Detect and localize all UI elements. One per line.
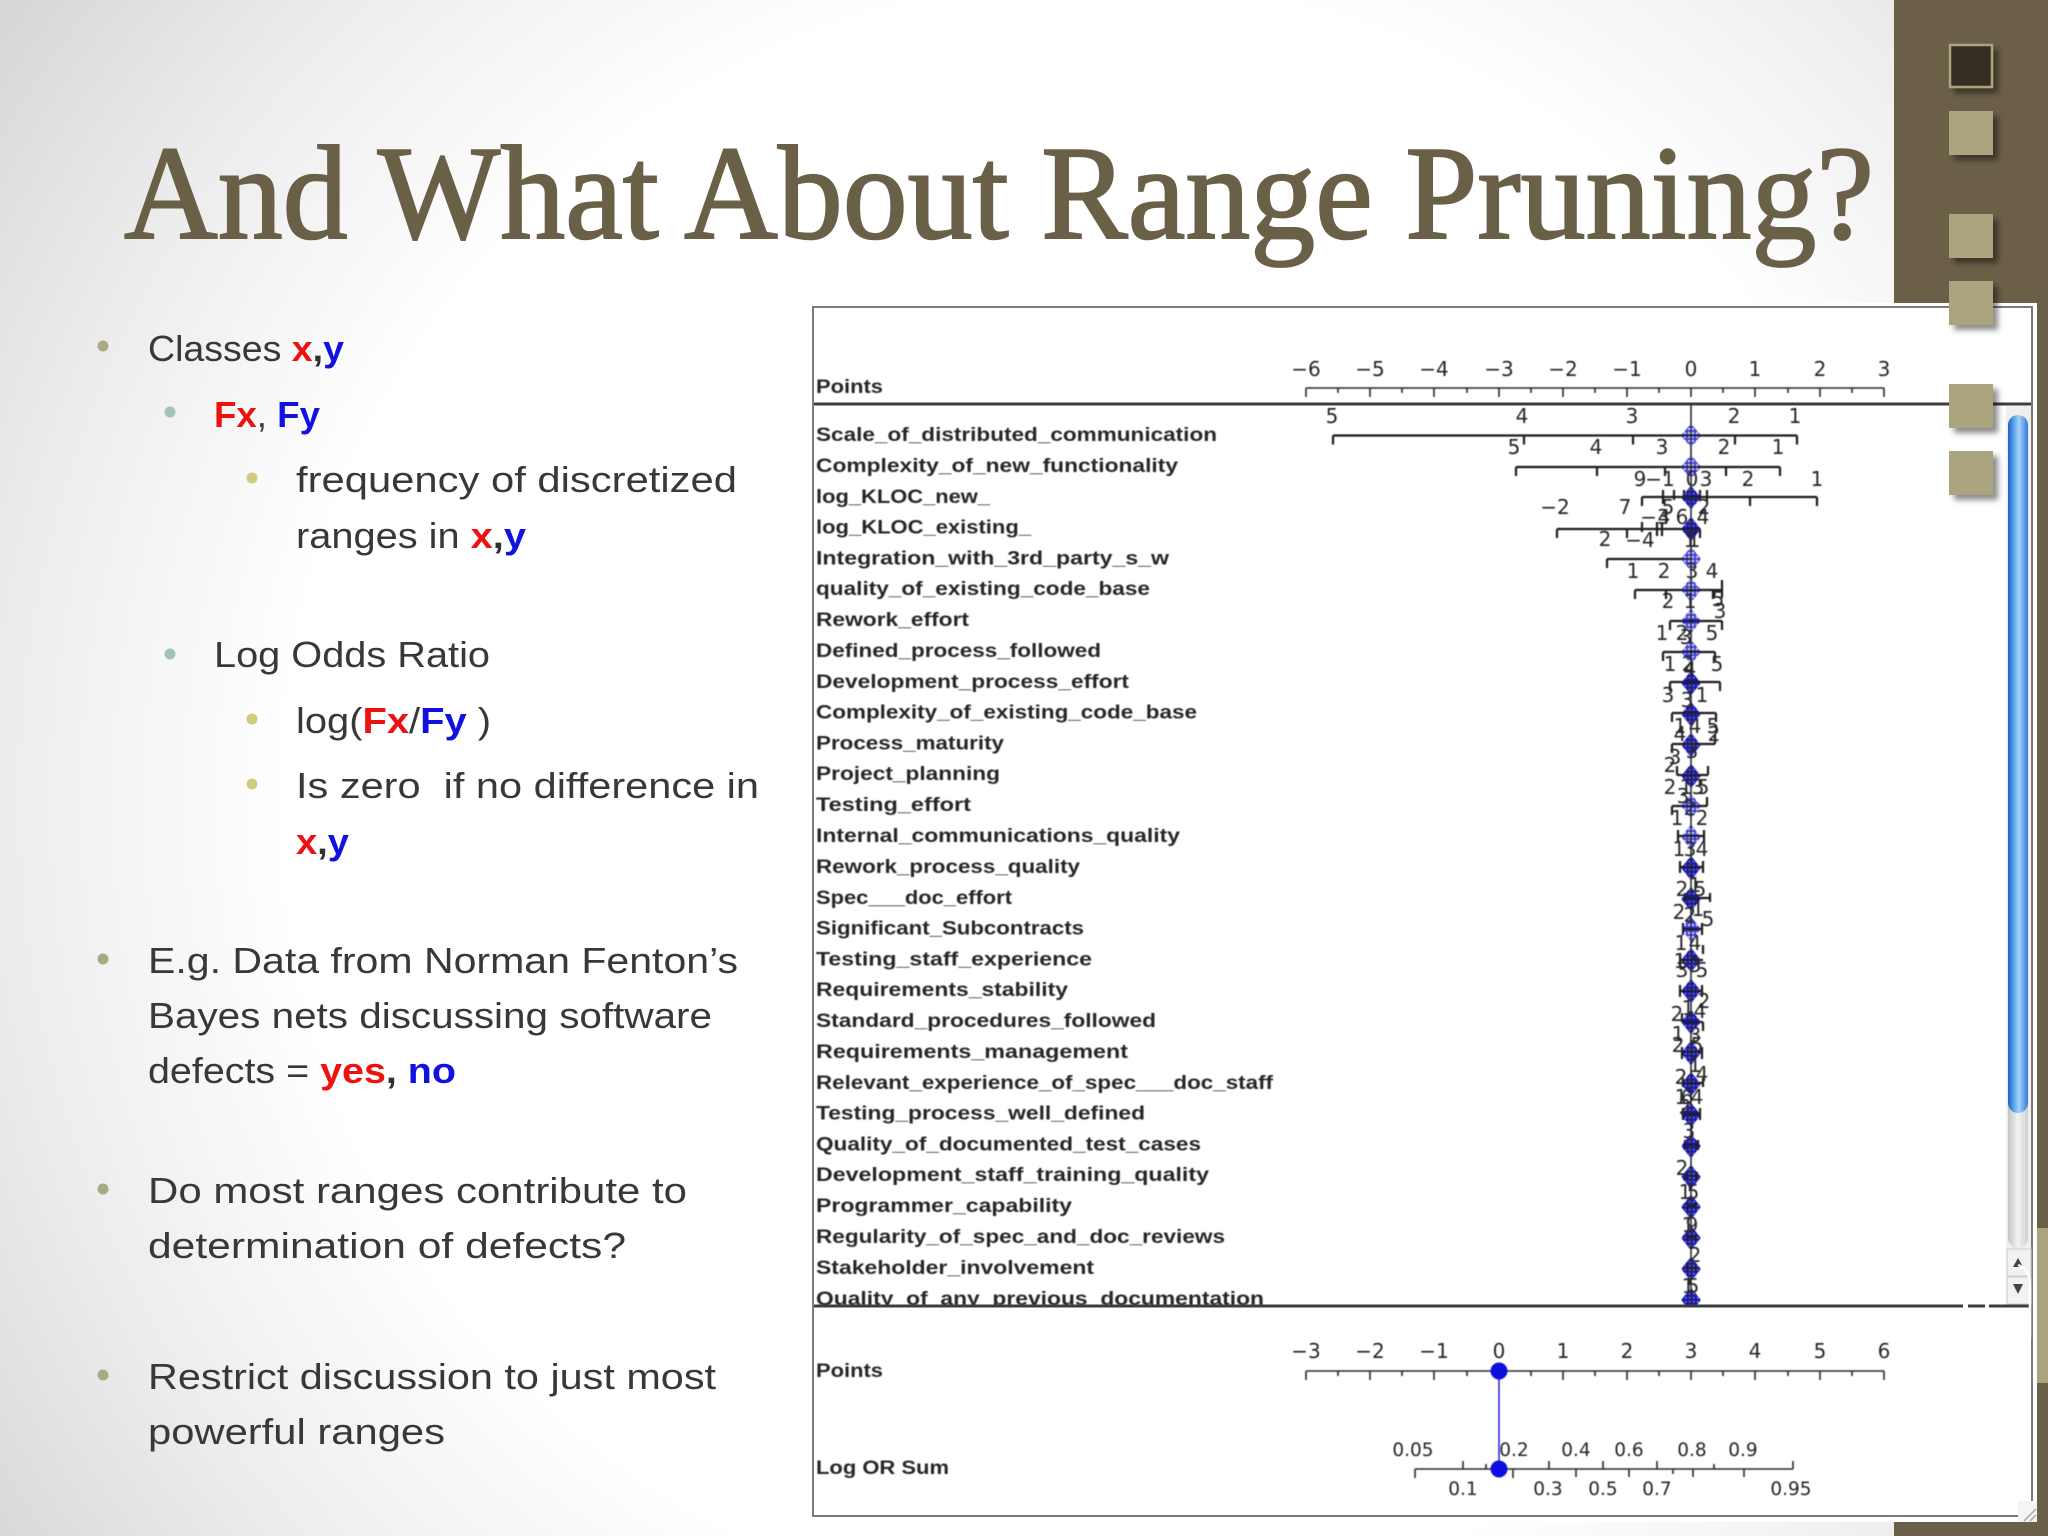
row point labels: 4 (1674, 722, 1686, 746)
square: 6 (1949, 451, 1993, 495)
text: frequency: frequency of discretized (296, 459, 737, 500)
row labels: Programmer_capability (816, 1196, 1073, 1217)
row point labels: 1 (1656, 621, 1668, 645)
row point labels: 3 (1692, 775, 1704, 799)
white mask under chart body (814, 1307, 2031, 1515)
row labels: Defined_process_followed (816, 641, 1101, 662)
bottom points axis: 4 (1749, 1339, 1761, 1363)
row point labels: 3 (1677, 784, 1689, 808)
row labels: Testing_staff_experience (816, 950, 1092, 970)
row point labels: 3 (1686, 559, 1698, 583)
row labels: Quality_of_any_previous_documentation (816, 1289, 1264, 1310)
row labels: Rework_effort (816, 610, 970, 631)
row point labels: 5 (1508, 435, 1520, 459)
row point labels: 5 (1696, 958, 1708, 982)
row point labels: 5 (1702, 907, 1714, 931)
row point labels: 1 (1672, 1022, 1684, 1046)
row labels: Development_process_effort (816, 672, 1130, 693)
row labels: Requirements_management (816, 1042, 1129, 1063)
title: And What About Range Pruning? (124, 119, 1874, 267)
window resize grip (2018, 1501, 2037, 1522)
bottom points axis: 3 (1685, 1339, 1697, 1363)
text: restrict line 2: powerful ranges (148, 1411, 445, 1452)
row point labels: 1 (1696, 683, 1708, 707)
row point labels: 1 (1664, 652, 1676, 676)
row point labels: 4 (1697, 505, 1709, 529)
text: ranges: ranges in x,y (296, 515, 526, 556)
row point labels: 4 (1516, 404, 1528, 428)
row labels: Stakeholder_involvement (816, 1258, 1095, 1279)
row labels: Testing_process_well_defined (816, 1104, 1145, 1124)
row point labels: 3 (1683, 1119, 1695, 1143)
scrollbar (2006, 406, 2031, 1304)
log OR sum axis: 0.4 (1561, 1440, 1591, 1461)
row point labels: 1 (1688, 528, 1700, 552)
row point labels: 9 (1634, 467, 1646, 491)
row point labels: 3 (1686, 739, 1698, 763)
row point labels: 4 (1706, 559, 1718, 583)
sidebar navigation squares (1949, 45, 1993, 495)
top axis (816, 357, 1890, 398)
row labels: log_KLOC_new_ (816, 487, 990, 508)
row labels (816, 425, 1274, 1310)
row point labels: 2 (1689, 1243, 1701, 1267)
log OR sum axis: 0.9 (1728, 1440, 1758, 1461)
row point labels: 4 (1691, 1085, 1703, 1109)
text: is zero: Is zero if no difference in (296, 765, 759, 806)
row point labels: 5 (1326, 404, 1338, 428)
row point labels: 2 (1673, 900, 1685, 924)
row point labels: 2 (1675, 1065, 1687, 1089)
row point labels: 3 (1689, 953, 1701, 977)
header divider (814, 402, 2031, 406)
row point labels: 4 (1684, 657, 1696, 681)
row point labels: 2 (1728, 404, 1740, 428)
row point labels: 5 (1711, 652, 1723, 676)
row point labels: 3 (1669, 745, 1681, 769)
row point labels: 4 (1696, 1062, 1708, 1086)
row point labels: 5 (1687, 1180, 1699, 1204)
text: do most line 1: Do most ranges contribute to (148, 1170, 687, 1211)
row point labels: 7 (1619, 495, 1631, 519)
row labels: Rework_process_quality (816, 857, 1081, 878)
row point labels: 1 (1684, 589, 1696, 613)
top axis: 0 (1685, 357, 1697, 381)
row point labels: 4 (1658, 505, 1670, 529)
row point labels: 2 (1698, 989, 1710, 1013)
row point labels: 1 (1675, 931, 1687, 955)
row point labels: 2 (1658, 559, 1670, 583)
text: do most line 2: determination of defects? (148, 1225, 626, 1266)
top axis: 3 (1878, 357, 1890, 381)
row labels: Spec___doc_effort (816, 888, 1013, 909)
bottom points axis: 5 (1814, 1339, 1826, 1363)
row point labels: 3 (1656, 435, 1668, 459)
row point labels: 1 (1680, 775, 1692, 799)
row point labels: 4 (1590, 435, 1602, 459)
row point labels: −2 (1540, 495, 1570, 519)
bottom points axis: −2 (1355, 1339, 1385, 1363)
top axis: Points (816, 377, 883, 398)
row point labels: 1 (1679, 1180, 1691, 1204)
row labels: log_KLOC_existing_ (816, 518, 1031, 538)
row labels: Regularity_of_spec_and_doc_reviews (816, 1227, 1225, 1248)
row labels: quality_of_existing_code_base (816, 579, 1150, 600)
row point labels: 1 (1682, 996, 1694, 1020)
row point labels: 5 (1691, 1033, 1703, 1057)
row point labels: 4 (1696, 837, 1708, 861)
square: 4 (1949, 281, 1993, 325)
row point labels: 2 (1599, 527, 1611, 551)
row point labels: 1 (1789, 404, 1801, 428)
row point labels: 2 (1676, 1156, 1688, 1180)
row labels: Testing_effort (816, 795, 972, 816)
row scales (1333, 436, 1817, 1272)
row point labels (1326, 404, 1823, 1298)
row labels: Quality_of_documented_test_cases (816, 1134, 1201, 1156)
row point labels: 2 (1742, 467, 1754, 491)
row point labels: 9 (1686, 1213, 1698, 1237)
row point labels: 5 (1707, 714, 1719, 738)
text: Fx, Fy: Fx, Fy (214, 394, 320, 435)
text: log odds ratio: Log Odds Ratio (214, 634, 490, 675)
bullet dots (98, 340, 258, 1380)
top axis: −3 (1484, 357, 1514, 381)
row point labels: 5 (1694, 877, 1706, 901)
row point labels: 1 (1811, 467, 1823, 491)
row point labels: 6 (1681, 1085, 1693, 1109)
square: 3 (1949, 214, 1993, 258)
row labels: Process_maturity (816, 734, 1005, 754)
square: 5 (1949, 384, 1993, 428)
row point labels: −1 (1645, 467, 1675, 491)
text: log formula: log(Fx/Fy ) (296, 700, 491, 741)
row point labels: 5 (1706, 621, 1718, 645)
row labels: Standard_procedures_followed (816, 1011, 1156, 1032)
row point labels: 3 (1680, 625, 1692, 649)
row point labels: 2 (1672, 1033, 1684, 1057)
top axis: −2 (1548, 357, 1578, 381)
log OR sum axis: 0.8 (1677, 1440, 1707, 1461)
row point labels: 1 (1684, 528, 1696, 552)
row point labels: 2 (1671, 1002, 1683, 1026)
row point labels: 5 (1687, 1274, 1699, 1298)
row point labels: 2 (1676, 621, 1688, 645)
row point labels: −4 (1625, 528, 1655, 552)
row labels: Project_planning (816, 764, 1000, 785)
log OR sum axis (816, 1440, 1812, 1500)
top axis: −6 (1291, 357, 1321, 381)
row point labels: 1 (1627, 559, 1639, 583)
bottom points axis: 0 (1493, 1339, 1505, 1363)
row point labels: −3 (1640, 505, 1670, 529)
row point labels: 2 (1684, 903, 1696, 927)
row point labels: 3 (1689, 1023, 1701, 1047)
row point labels: 1 (1674, 714, 1686, 738)
text: classes: Classes x,y (148, 328, 344, 369)
text: restrict line 1: Restrict discussion to just most (148, 1356, 716, 1397)
log OR sum axis: Log OR Sum (816, 1458, 949, 1479)
log OR sum axis: 0.6 (1614, 1440, 1644, 1461)
log OR sum axis: 0.1 (1448, 1479, 1478, 1500)
row point labels: 3 (1681, 688, 1693, 712)
row point labels: 3 (1662, 683, 1674, 707)
top axis: 2 (1814, 357, 1826, 381)
row labels: Relevant_experience_of_spec___doc_staff (816, 1073, 1274, 1094)
log OR sum axis: 0.3 (1533, 1479, 1563, 1500)
top axis: 1 (1749, 357, 1761, 381)
row point labels: 4 (1689, 714, 1701, 738)
panel: nomogram chart (810, 303, 2037, 1522)
row point labels: 0 (1686, 467, 1698, 491)
log OR sum axis: 0.7 (1642, 1479, 1672, 1500)
row point labels: 1 (1682, 1213, 1694, 1237)
row point labels: 1 (1689, 873, 1701, 897)
row point labels: 2 (1718, 435, 1730, 459)
row labels: Scale_of_distributed_communication (816, 425, 1217, 446)
row point labels: 1 (1674, 949, 1686, 973)
row point labels: 2 (1664, 775, 1676, 799)
top axis: −1 (1612, 357, 1642, 381)
row point labels: 1 (1673, 837, 1685, 861)
row point labels: 3 (1700, 467, 1712, 491)
row point labels: 2 (1696, 806, 1708, 830)
row point labels: 5 (1662, 495, 1674, 519)
white arc artefact (2018, 1265, 2030, 1351)
row labels: Requirements_stability (816, 980, 1069, 1001)
row point labels: 1 (1682, 1274, 1694, 1298)
text: e.g. line 3: defects = yes, no (148, 1050, 456, 1091)
row point labels: 2 (1662, 589, 1674, 613)
row point labels: 2 (1676, 877, 1688, 901)
row labels: Development_staff_training_quality (816, 1165, 1210, 1186)
bottom points axis: 2 (1621, 1339, 1633, 1363)
top axis: −5 (1355, 357, 1385, 381)
row point labels: 3 (1684, 837, 1696, 861)
row labels: Complexity_of_existing_code_base (816, 702, 1197, 724)
footer divider (814, 1304, 2031, 1308)
row labels: Significant_Subcontracts (816, 918, 1084, 940)
row point labels: 2 (1698, 495, 1710, 519)
row point labels: 2 (1664, 753, 1676, 777)
text: e.g. line 1: E.g. Data from Norman Fenton’s (148, 940, 738, 981)
row point labels: 1 (1675, 1085, 1687, 1109)
top axis: −4 (1419, 357, 1449, 381)
row point labels: 2 (1684, 796, 1696, 820)
square: active (1950, 45, 1992, 87)
row point labels: 1 (1671, 806, 1683, 830)
row point labels: 6 (1676, 505, 1688, 529)
panel: bullet list (98, 328, 759, 1452)
row point labels: 3 (1714, 599, 1726, 623)
row point labels: 3 (1626, 404, 1638, 428)
text: x,y: x,y (296, 821, 349, 862)
row point labels: 1 (1772, 435, 1784, 459)
row point labels: 2 (1708, 722, 1720, 746)
bottom points axis (816, 1339, 1890, 1382)
bottom points axis: 6 (1878, 1339, 1890, 1363)
row point labels: 4 (1694, 999, 1706, 1023)
row point labels: 1 (1692, 897, 1704, 921)
bottom points axis: Points (816, 1361, 883, 1382)
row point labels: 4 (1689, 931, 1701, 955)
text: e.g. line 2: Bayes nets discussing software (148, 995, 712, 1036)
row labels: Integration_with_3rd_party_s_w (816, 548, 1169, 570)
row point labels: 2 (1679, 1095, 1691, 1119)
row point labels: 1 (1689, 1053, 1701, 1077)
row labels: Internal_communications_quality (816, 826, 1181, 847)
log OR sum axis: 0.2 (1499, 1440, 1529, 1461)
row point labels: 3 (1676, 958, 1688, 982)
row labels: Complexity_of_new_functionality (816, 456, 1179, 477)
row value diamonds (1683, 426, 1699, 1310)
square: 2 (1949, 111, 1993, 155)
row point labels: 2 (1682, 652, 1694, 676)
bottom points axis: −1 (1419, 1339, 1449, 1363)
log OR sum axis: 0.05 (1392, 1440, 1434, 1461)
zero reference line (1690, 404, 1692, 1306)
log OR sum axis: 0.5 (1588, 1479, 1618, 1500)
row point labels: 5 (1697, 775, 1709, 799)
bottom points axis: 1 (1557, 1339, 1569, 1363)
sidebar (1894, 0, 2048, 1536)
bottom points axis: −3 (1291, 1339, 1321, 1363)
log OR sum axis: 0.95 (1770, 1479, 1812, 1500)
prediction line and markers (1490, 1362, 1508, 1478)
row point labels: 5 (1712, 587, 1724, 611)
